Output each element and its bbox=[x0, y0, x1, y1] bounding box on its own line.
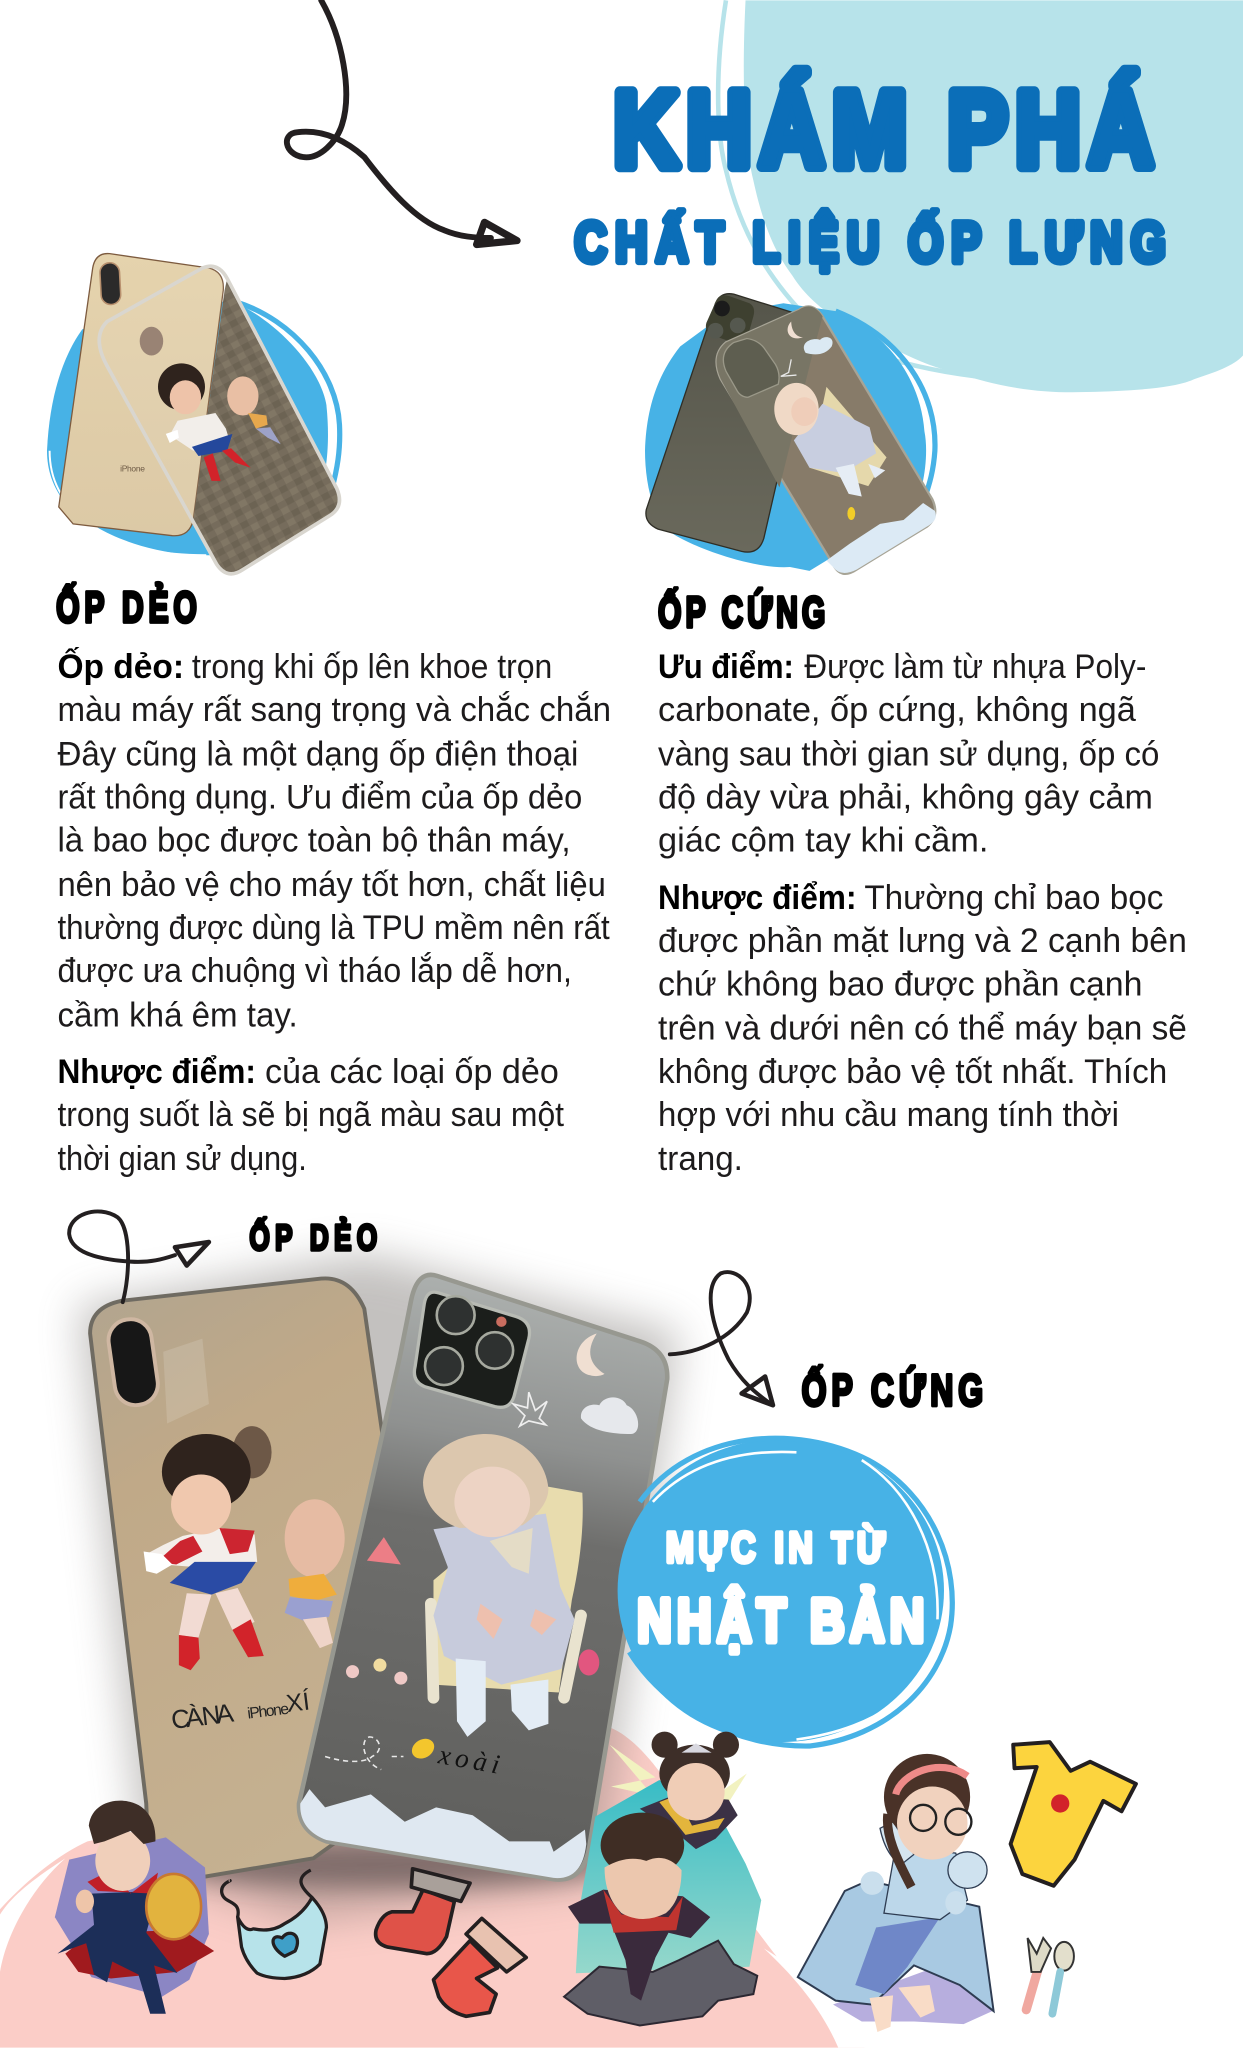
glasses bbox=[910, 1805, 971, 1835]
badge text line 1: MỰC IN TỪ bbox=[666, 1523, 886, 1572]
flowers bbox=[346, 1659, 407, 1685]
text block: hard case: không được bảo vệ tốt nhất. Thích bbox=[658, 1053, 1167, 1091]
iPhone wordmark: iPhone bbox=[120, 464, 145, 474]
hand-written name: CÀ NA bbox=[169, 1698, 236, 1735]
blue splash bbox=[47, 294, 340, 555]
clear hard case bbox=[717, 306, 935, 574]
background blob: pink bbox=[0, 1725, 864, 2048]
camera bbox=[99, 262, 121, 305]
badge: Japanese ink bbox=[618, 1438, 952, 1746]
arrow: to hard case label bbox=[670, 1272, 773, 1405]
text block: hard case: được phần mặt lưng và 2 cạnh bên bbox=[658, 922, 1187, 960]
label: hard case: ỐP CỨNG bbox=[802, 1364, 983, 1416]
chair posts bbox=[431, 1604, 581, 1698]
badge white highlights bbox=[653, 1452, 938, 1740]
shadow on pink bbox=[170, 1843, 614, 1887]
face bbox=[454, 1467, 530, 1537]
rattan print bbox=[193, 278, 339, 574]
boy face bbox=[605, 1858, 682, 1919]
text block: soft case: thường được dùng là TPU mềm nên rất bbox=[57, 909, 610, 947]
sticker: yellow onesie bbox=[1011, 1742, 1136, 1886]
girl buns bbox=[652, 1732, 678, 1758]
text block: soft case: của các loại ốp dẻo bbox=[265, 1053, 559, 1091]
text block: hard case bbox=[658, 648, 1187, 1178]
sticker: boy as sorcerer bbox=[55, 1801, 214, 2014]
hand-written name: XÍ bbox=[285, 1688, 311, 1718]
text block: hard case: Thường chỉ bao bọc bbox=[864, 879, 1163, 917]
text block: soft case: thời gian sử dụng. bbox=[57, 1140, 307, 1178]
sticker: girl as princess bbox=[798, 1754, 994, 2032]
photo: soft case phones bbox=[47, 254, 340, 574]
case area over phone bbox=[717, 306, 823, 487]
title line 1: KHÁM PHÁ bbox=[614, 69, 1153, 189]
watermelon bbox=[367, 1537, 401, 1565]
mango bbox=[847, 507, 855, 520]
shadow under phones bbox=[78, 1254, 679, 1920]
teal splash bbox=[576, 1780, 761, 1973]
golden shield bbox=[146, 1874, 201, 1939]
chair print bbox=[810, 387, 887, 486]
boy suit red bbox=[603, 1890, 683, 1933]
text block: soft case: Đây cũng là một dạng ốp điện thoại bbox=[57, 735, 578, 773]
star bbox=[513, 1392, 547, 1426]
badge outer stroke bbox=[629, 1438, 952, 1746]
sticker: fork and spoon bbox=[1026, 1938, 1074, 2014]
girl sticker bbox=[144, 1434, 264, 1670]
face bbox=[897, 1787, 968, 1860]
text block: soft case bbox=[57, 647, 611, 1178]
hair bbox=[89, 1801, 155, 1844]
moon bbox=[788, 322, 803, 338]
arrow: top curved arrow to title bbox=[287, 0, 517, 245]
graphite iPhone back bbox=[646, 294, 810, 552]
text block: soft case: được ưa chuộng vì tháo lắp dễ hơn, bbox=[57, 952, 572, 990]
rock platform bbox=[564, 1941, 757, 2025]
girl sticker bbox=[158, 363, 251, 481]
dress bbox=[798, 1881, 994, 2011]
camera module bbox=[414, 1292, 530, 1407]
braid bbox=[887, 1814, 911, 1887]
baby sticker bbox=[227, 376, 281, 444]
text block: soft case: Ốp dẻo: bbox=[57, 647, 184, 686]
cloud print bbox=[826, 503, 936, 573]
sock two bbox=[433, 1918, 526, 2016]
lens cutout bbox=[723, 339, 779, 397]
photo: large hard case phone bbox=[299, 1275, 667, 1880]
dashed flight path bbox=[325, 1737, 403, 1770]
cloud bbox=[581, 1397, 638, 1434]
strawberry bbox=[578, 1649, 599, 1676]
baby print bbox=[774, 383, 885, 497]
clear case outline bbox=[99, 266, 339, 574]
text block: hard case: carbonate, ốp cứng, không ngã bbox=[658, 691, 1136, 729]
red collar bbox=[87, 1870, 158, 1894]
tiara bbox=[682, 1743, 712, 1753]
background blob: light blue bbox=[718, 0, 1243, 392]
text block: soft case: là bao bọc được toàn bộ thân máy, bbox=[57, 822, 571, 860]
text block: hard case: vàng sau thời gian sử dụng, ốp có bbox=[658, 735, 1159, 773]
navy costume bbox=[57, 1891, 178, 2014]
sticker: red socks bbox=[376, 1869, 526, 2016]
blue splash bbox=[645, 303, 935, 571]
puff sleeves bbox=[948, 1852, 987, 1888]
badge circle bbox=[618, 1439, 944, 1742]
legs bbox=[456, 1659, 548, 1737]
sticker: bib bbox=[222, 1870, 326, 1978]
girl hair bbox=[659, 1745, 730, 1802]
title line 2: CHẤT LIỆU ỐP LƯNG bbox=[574, 211, 1166, 274]
boy hair bbox=[601, 1813, 684, 1878]
arrow: to soft case label bbox=[69, 1211, 209, 1302]
mango bbox=[408, 1735, 438, 1762]
gold iPhone back bbox=[59, 254, 223, 536]
label: soft case: ỐP DẺO bbox=[249, 1217, 377, 1258]
light reflection bbox=[163, 1339, 209, 1424]
text block: hard case: trên và dưới nên có thể máy bạn sẽ bbox=[658, 1010, 1187, 1048]
hat bbox=[423, 1434, 548, 1528]
camera module bbox=[706, 295, 754, 344]
text block: soft case: trong khi ốp lên khoe trọn bbox=[192, 648, 552, 686]
dress centre fold bbox=[855, 1917, 940, 1994]
yellow wings bbox=[610, 1745, 747, 1809]
text block: soft case: màu máy rất sang trọng và chắc chắn bbox=[57, 691, 611, 729]
headband bbox=[896, 1767, 968, 1794]
text block: hard case: độ dày vừa phải, không gây cảm bbox=[658, 779, 1153, 817]
dress bbox=[433, 1514, 574, 1685]
apple logo bbox=[140, 327, 163, 355]
text block: hard case: hợp với nhu cầu mang tính thời bbox=[658, 1096, 1119, 1134]
baby sticker bbox=[285, 1499, 345, 1648]
hands bbox=[477, 1604, 556, 1639]
legs bbox=[870, 1985, 935, 2032]
star bbox=[781, 359, 796, 376]
boy suit bbox=[568, 1890, 710, 2001]
baby photo bbox=[423, 1434, 583, 1737]
cloud print at base bbox=[300, 1789, 586, 1878]
fist bbox=[76, 1890, 94, 1913]
bodice bbox=[884, 1847, 968, 1920]
sock one bbox=[376, 1869, 470, 1954]
cloud bbox=[804, 337, 833, 354]
text block: hard case: giác cộm tay khi cầm. bbox=[658, 822, 988, 860]
hand-written name bbox=[169, 1688, 311, 1735]
text block: soft case: Nhược điểm: bbox=[57, 1053, 256, 1091]
photo: hard case phones bbox=[645, 294, 936, 574]
text block: hard case: trang. bbox=[658, 1140, 743, 1178]
apple logo bbox=[232, 1426, 272, 1478]
heading: soft case: ỐP DẺO bbox=[56, 582, 197, 631]
photo: large soft case phone bbox=[90, 1278, 392, 1881]
phone body bbox=[90, 1278, 392, 1881]
face bbox=[95, 1831, 150, 1891]
heading: hard case: ỐP CỨNG bbox=[658, 588, 825, 636]
girl face bbox=[667, 1763, 725, 1820]
red cloak lining bbox=[65, 1930, 214, 1978]
camera bbox=[106, 1317, 161, 1408]
title bbox=[574, 69, 1166, 274]
text block: hard case: Được làm từ nhựa Poly- bbox=[804, 648, 1146, 686]
moon bbox=[577, 1333, 605, 1376]
sticker: boy and girl heroes bbox=[564, 1732, 761, 2025]
gloves bbox=[860, 1871, 884, 1895]
text block: hard case: Nhược điểm: bbox=[658, 879, 857, 917]
text block: hard case: chứ không bao được phần cạnh bbox=[658, 965, 1142, 1003]
text block: soft case: nên bảo vệ cho máy tốt hơn, chất liệu bbox=[57, 866, 606, 904]
badge text line 2: NHẬT BẢN bbox=[637, 1586, 924, 1655]
text block: hard case: Ưu điểm: bbox=[658, 648, 794, 686]
purple backdrop bbox=[55, 1837, 209, 1997]
text block: soft case: trong suốt là sẽ bị ngã màu sau một bbox=[57, 1096, 565, 1134]
hand-written name: iPhone bbox=[246, 1701, 290, 1723]
text block: soft case: rất thông dụng. Ưu điểm của ốp dẻo bbox=[57, 779, 582, 817]
text block: soft case: cầm khá êm tay. bbox=[57, 997, 298, 1035]
hair bbox=[884, 1754, 970, 1840]
petticoat bbox=[833, 1965, 992, 2024]
name: xoài bbox=[435, 1739, 502, 1780]
phone body bbox=[299, 1275, 667, 1880]
girl body bbox=[640, 1796, 738, 1849]
chair bbox=[433, 1486, 583, 1693]
